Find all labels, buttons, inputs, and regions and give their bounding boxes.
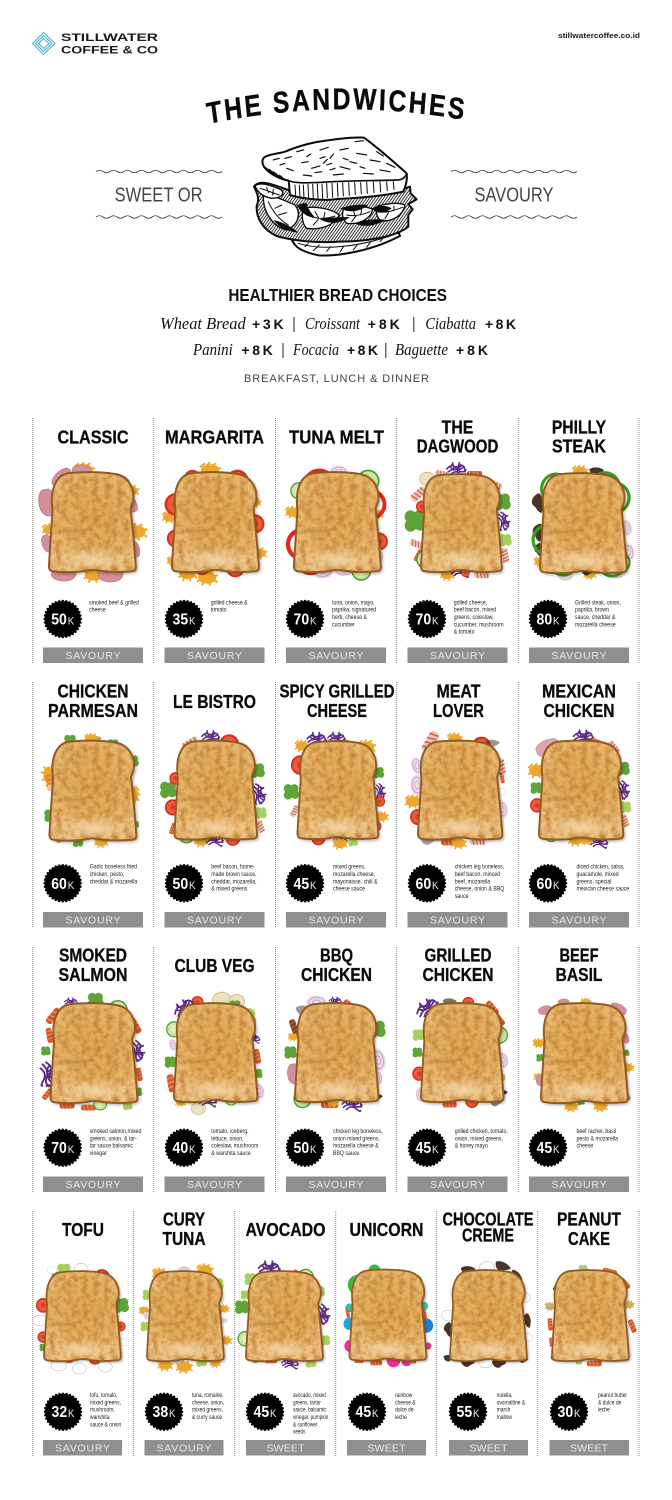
price badge: [45, 865, 81, 901]
heading: [552, 416, 607, 457]
description: ovomaltine &: [497, 1400, 525, 1407]
heading: [542, 680, 616, 721]
illustration: engraved sandwich: [254, 137, 417, 255]
description: vinegar: [90, 1151, 107, 1157]
description: sauce, balsamic: [293, 1407, 327, 1414]
description: warishita: [89, 1414, 110, 1421]
description: avocado, mixed: [293, 1392, 326, 1399]
price badge: 45K: [536, 1139, 560, 1157]
heading: CLUB VEG: [174, 955, 254, 976]
description: sauce & onion: [90, 1422, 121, 1429]
sandwich image: [343, 1264, 433, 1367]
panel: Smoked Salmon: [38, 944, 147, 1192]
category tag: SAVOURY: [430, 914, 485, 926]
bread options line 1: Ciabatta: [425, 314, 476, 333]
heading: [301, 944, 372, 985]
category tag: [550, 1440, 629, 1456]
category tag: SAVOURY: [308, 914, 364, 926]
category tag: SAVOURY: [187, 914, 242, 926]
price badge: [166, 601, 202, 637]
bread options line 1: [160, 314, 516, 333]
description: mixed greens,: [333, 864, 366, 871]
description: sauce, cheddar &: [575, 615, 615, 621]
category tag: [408, 912, 508, 928]
description: greens, onion, & tar-: [90, 1136, 137, 1143]
heading: PEANUT: [557, 1209, 622, 1230]
heading: TUNA: [162, 1228, 206, 1249]
category tag: SAVOURY: [187, 1179, 242, 1191]
heading: THE: [442, 416, 473, 437]
category tag: [43, 648, 143, 663]
heading: [48, 680, 138, 721]
heading: LOVER: [433, 700, 484, 721]
description: guacamole, mixed: [576, 872, 619, 878]
description: tomato, iceberg,: [211, 1129, 249, 1135]
price badge: 45K: [355, 1403, 379, 1421]
description: lettuce, onion,: [211, 1136, 244, 1143]
price badge: 55K: [456, 1403, 480, 1421]
panel: Cury Tuna: [139, 1209, 232, 1456]
price badge: 80K: [536, 611, 560, 629]
price badge: [45, 1394, 81, 1430]
category tag: [43, 1176, 143, 1192]
heading: [433, 680, 484, 721]
description: cheddar, mozarella,: [211, 879, 257, 886]
category tag: [286, 912, 386, 928]
logo text: [61, 32, 159, 56]
price badge: 32K: [51, 1403, 75, 1421]
panel: The Dagwood: [405, 416, 513, 663]
price badge: 40K: [172, 1139, 196, 1157]
title: the sandwiches: THE SANDWICHES: [206, 88, 464, 123]
price badge: 50K: [51, 611, 74, 629]
description: mexican cheese sauce: [576, 886, 629, 893]
description: peanut butter: [598, 1392, 627, 1399]
heading: MARGARITA: [165, 426, 264, 448]
price badge: [409, 1130, 445, 1166]
description: smoked salmon,mixed: [90, 1129, 141, 1135]
description: cheddar & mozarella: [90, 879, 138, 886]
category tag: SAVOURY: [66, 1179, 120, 1191]
sandwich image: [235, 1261, 332, 1369]
subheading: breakfast lunch dinner: BREAKFAST, LUNCH & DINNER: [244, 373, 429, 385]
sandwich image: [528, 729, 631, 848]
description: tuna, onion, mayo,: [332, 600, 375, 607]
bread options line 1: Wheat Bread: [160, 314, 246, 333]
category tag: [43, 912, 143, 928]
category tag: SAVOURY: [308, 650, 364, 662]
description: cheese &: [395, 1400, 416, 1407]
description: mozarella cheese &: [333, 1143, 379, 1150]
heading: GRILLED: [424, 944, 492, 966]
sandwich image: [285, 465, 388, 581]
description: tofu, tomato,: [90, 1392, 118, 1399]
heading: DAGWOOD: [417, 436, 498, 457]
bread options line 2: [192, 340, 488, 359]
description: & dulce de: [598, 1400, 621, 1407]
price badge: 60K: [51, 875, 74, 893]
description: Grilled steak, onion,: [575, 600, 621, 607]
description: greens, special: [576, 879, 611, 886]
heading: PARMESAN: [48, 700, 138, 721]
category tag: [164, 1176, 264, 1192]
description: greens, coleslow,: [454, 615, 494, 621]
price badge: [247, 1394, 283, 1430]
sandwich image: [405, 730, 509, 849]
logo: [32, 32, 159, 56]
description: diced chicken, salsa,: [576, 864, 625, 871]
category tag: [529, 1176, 629, 1192]
logo text: COFFEE & CO: [61, 44, 159, 56]
description: cucumber: [332, 622, 355, 628]
description: beef bacon, mixed: [454, 607, 496, 614]
price badge: [45, 601, 81, 637]
panel: Spicy Grilled Cheese: [280, 680, 394, 928]
heading: [162, 1209, 206, 1249]
description: beef, mozarella: [455, 879, 491, 886]
heading: [280, 680, 394, 721]
description: made brown sauce,: [211, 872, 257, 878]
description: beef bacon, minced: [455, 872, 500, 878]
heading: CHICKEN: [301, 964, 372, 985]
description: cheese sauce: [333, 886, 365, 893]
description: paprika, signatured: [332, 607, 376, 614]
description: paprika, brown: [575, 607, 609, 614]
category tag: [529, 648, 629, 663]
description: coleslaw, mushroom: [211, 1143, 258, 1150]
heading: [58, 944, 128, 985]
price badge: [530, 1130, 566, 1166]
description: grilled chicken, tomato,: [455, 1129, 508, 1135]
category tag: SWEET: [368, 1442, 406, 1454]
panel: Tuna Melt: [285, 426, 388, 663]
panel: Meat Lover: [405, 680, 509, 928]
icon: logo diamond: [32, 32, 55, 54]
tagline left: sweet or: SWEET OR: [115, 185, 203, 207]
heading: CHEESE: [307, 700, 367, 721]
sandwich image: [530, 465, 636, 581]
heading: TUNA MELT: [289, 426, 385, 448]
lettuce and fillings: [254, 183, 417, 242]
heading: BASIL: [556, 964, 602, 985]
price badge: 70K: [415, 611, 439, 629]
description: mixed greens,: [90, 1400, 121, 1407]
category tag: [164, 912, 264, 928]
heading: healthier bread choices: HEALTHIER BREAD CHOICES: [228, 285, 447, 305]
panel: Beef Basil: [529, 944, 635, 1192]
heading: SALMON: [58, 964, 128, 985]
heading: AVOCADO: [246, 1219, 326, 1240]
sandwich image: [284, 732, 389, 850]
heading: CHICKEN: [422, 964, 494, 985]
price badge: 60K: [415, 875, 439, 893]
category tag: [529, 912, 629, 928]
logo text: STILLWATER: [61, 32, 158, 44]
description: & tomato: [454, 629, 475, 636]
description: herb, cheese &: [332, 615, 367, 621]
panel: Unicorn: [343, 1219, 433, 1456]
bread options line 2: + 8 K: [241, 342, 273, 358]
description: & curry sauce: [192, 1414, 222, 1421]
panel: Tofu: [33, 1219, 129, 1456]
bread options line 2: Panini: [192, 340, 233, 359]
heading: CHICKEN: [58, 680, 128, 702]
heading: CREME: [462, 1225, 514, 1246]
category tag: SWEET: [570, 1442, 609, 1454]
panel: Le Bistro: [160, 691, 269, 928]
description: leche: [598, 1407, 610, 1414]
description: tar sauce balsamic: [90, 1143, 133, 1150]
description: beef bacon, home-: [211, 864, 255, 871]
heading: BEEF: [560, 944, 598, 966]
heading: CLASSIC: [58, 426, 128, 448]
price badge: 60K: [536, 875, 560, 893]
category tag: SWEET: [470, 1442, 508, 1454]
category tag: SAVOURY: [552, 650, 606, 662]
heading: CURY: [163, 1209, 206, 1230]
category tag: [449, 1440, 528, 1456]
description: dulce de: [395, 1407, 414, 1414]
description: cheese: [89, 607, 106, 614]
price badge: [409, 601, 445, 637]
description: rainbow: [395, 1392, 413, 1399]
description: nutella,: [497, 1392, 513, 1399]
category tag: [286, 1176, 386, 1192]
bread options line 1: + 8 K: [368, 316, 400, 332]
panel: Peanut Cake: [545, 1209, 637, 1456]
description: mixed greens,: [192, 1407, 223, 1414]
category tag: [164, 648, 264, 663]
heading: CHICKEN: [544, 700, 614, 721]
price badge: 30K: [557, 1403, 581, 1421]
description: onion mixed greens,: [333, 1136, 380, 1143]
description: leche: [395, 1414, 407, 1421]
description: BBQ sauce: [333, 1151, 359, 1157]
sandwich image: [162, 462, 267, 586]
category tag: [408, 1176, 508, 1192]
heading: SPICY GRILLED: [280, 680, 394, 702]
price badge: [287, 865, 323, 901]
category tag: [347, 1440, 426, 1456]
category tag: SAVOURY: [430, 1179, 485, 1191]
tagline right: savoury: SAVOURY: [474, 185, 554, 207]
price badge: 45K: [293, 875, 317, 893]
description: cucumber, mushroom: [454, 622, 504, 628]
heading: SMOKED: [59, 944, 127, 966]
bread options line 1: + 8 K: [485, 316, 516, 332]
heading: [557, 1209, 622, 1249]
price badge: [287, 1130, 323, 1166]
heading: LE BISTRO: [173, 691, 256, 712]
description: cheese, onion,: [192, 1400, 224, 1407]
sandwich image: [441, 1260, 532, 1368]
heading: PHILLY: [552, 416, 607, 437]
bottom bread: [290, 227, 400, 255]
panel: Grilled Chicken: [408, 944, 510, 1192]
category tag: [144, 1440, 224, 1456]
sandwich image: [412, 994, 510, 1108]
description: beef racher, basil: [576, 1129, 616, 1135]
sandwich image: [139, 1264, 232, 1374]
heading: CHOCOLATE: [442, 1209, 534, 1230]
description: pesto & mozarella: [576, 1136, 619, 1143]
bread options line 2: + 8 K: [347, 342, 378, 358]
heading: TOFU: [62, 1219, 104, 1240]
price badge: 50K: [172, 875, 196, 893]
description: grilled cheese,: [454, 600, 487, 607]
heading: [417, 416, 498, 457]
price badge: [287, 601, 323, 637]
sandwich image: [284, 995, 387, 1111]
category tag: SAVOURY: [187, 650, 242, 662]
price badge: [530, 865, 566, 901]
panel: Philly Steak: [529, 416, 636, 663]
price badge: [45, 1130, 81, 1166]
category tag: SAVOURY: [156, 1442, 212, 1454]
price badge: [530, 601, 566, 637]
panel: Club Veg: [164, 955, 267, 1192]
description: cheese: [576, 1143, 593, 1150]
heading: [422, 944, 494, 985]
top bread: [262, 137, 407, 200]
description: mayonaisse, chili &: [333, 879, 377, 886]
description: mozarella cheese: [575, 622, 616, 628]
description: tuna, romaine,: [192, 1392, 224, 1399]
description: sauce: [455, 894, 469, 900]
tagline right: savoury: [451, 170, 577, 218]
category tag: SAVOURY: [552, 1179, 606, 1191]
tagline left: sweet or: [96, 170, 222, 218]
website url: stillwatercoffee.co.id: [558, 31, 640, 40]
heading: [442, 1209, 534, 1246]
price badge: [166, 865, 202, 901]
description: chicken leg boneless,: [333, 1129, 383, 1135]
category tag: SAVOURY: [552, 914, 606, 926]
description: onion, mixed greens,: [455, 1136, 503, 1143]
description: & honey mayo: [455, 1143, 489, 1150]
category tag: SAVOURY: [55, 1442, 110, 1454]
sandwich image: [33, 1263, 129, 1374]
description: vinegar, pumpkin: [293, 1414, 328, 1421]
bread options line 1: Croissant: [305, 314, 361, 333]
category tag: [286, 648, 386, 663]
panel: Chocolate Creme: [441, 1209, 534, 1456]
description: seeds: [293, 1429, 306, 1436]
sandwich image: [533, 998, 635, 1112]
price badge: 70K: [293, 611, 317, 629]
price badge: [551, 1394, 587, 1430]
price badge: 45K: [415, 1139, 439, 1157]
panel: Avocado: [235, 1219, 332, 1456]
panel: Mexican Chicken: [528, 680, 631, 928]
price badge: 50K: [293, 1139, 317, 1157]
panel: Margarita: [162, 426, 267, 663]
price badge: 38K: [152, 1403, 176, 1421]
category tag: SAVOURY: [66, 650, 120, 662]
heading: MEAT: [436, 680, 481, 702]
category tag: [43, 1440, 122, 1456]
category tag: SAVOURY: [430, 650, 485, 662]
description: mushroom,: [90, 1407, 115, 1414]
price badge: 70K: [51, 1139, 74, 1157]
bread options line 2: Baguette: [395, 340, 448, 359]
sandwich image: [545, 1265, 637, 1366]
price badge: 45K: [253, 1403, 277, 1421]
bread options line 2: Focacia: [292, 340, 339, 359]
description: & warshita sauce: [211, 1151, 251, 1157]
description: marsh: [497, 1407, 510, 1414]
price badge: [409, 865, 445, 901]
price badge: 35K: [172, 611, 196, 629]
price badge: [349, 1394, 385, 1430]
description: & sunflower: [293, 1422, 318, 1429]
category tag: [246, 1440, 325, 1456]
heading: BBQ: [320, 944, 353, 966]
description: greens, tartar: [293, 1400, 321, 1407]
description: Garlic boneless fried: [90, 864, 137, 871]
category tag: SAVOURY: [308, 1179, 364, 1191]
description: mallow: [497, 1414, 513, 1421]
description: mozarella cheese,: [333, 872, 375, 878]
sandwich image: [405, 462, 513, 581]
category tag: [408, 648, 508, 663]
bread options line 2: + 8 K: [456, 342, 488, 358]
heading: STEAK: [552, 436, 607, 457]
panel: Classic: [37, 426, 148, 663]
description: tomato: [211, 607, 227, 614]
bread options line 1: + 3 K: [252, 316, 284, 332]
description: chicken, pesto,: [90, 872, 125, 878]
panel: Chicken Parmesan: [40, 680, 143, 928]
category tag: SWEET: [266, 1442, 305, 1454]
description: & mixed greens: [211, 886, 247, 893]
description: smoked beef & grilled: [89, 600, 139, 607]
heading: UNICORN: [350, 1219, 424, 1240]
description: chicken leg boneless,: [455, 864, 505, 871]
sandwich image: [40, 733, 140, 848]
sandwich image: [160, 730, 269, 847]
heading: CAKE: [568, 1228, 610, 1249]
description: cheese, onion & BBQ: [455, 886, 505, 893]
sandwich image: [38, 993, 147, 1111]
category tag: SAVOURY: [66, 914, 120, 926]
price badge: [146, 1394, 182, 1430]
price badge: [450, 1394, 486, 1430]
sandwich image: [165, 992, 267, 1115]
price badge: [166, 1130, 202, 1166]
sandwich image: [37, 462, 148, 583]
heading: MEXICAN: [542, 680, 616, 702]
heading: [556, 944, 602, 985]
panel: BBQ Chicken: [284, 944, 387, 1192]
description: grilled cheese &: [211, 600, 248, 607]
